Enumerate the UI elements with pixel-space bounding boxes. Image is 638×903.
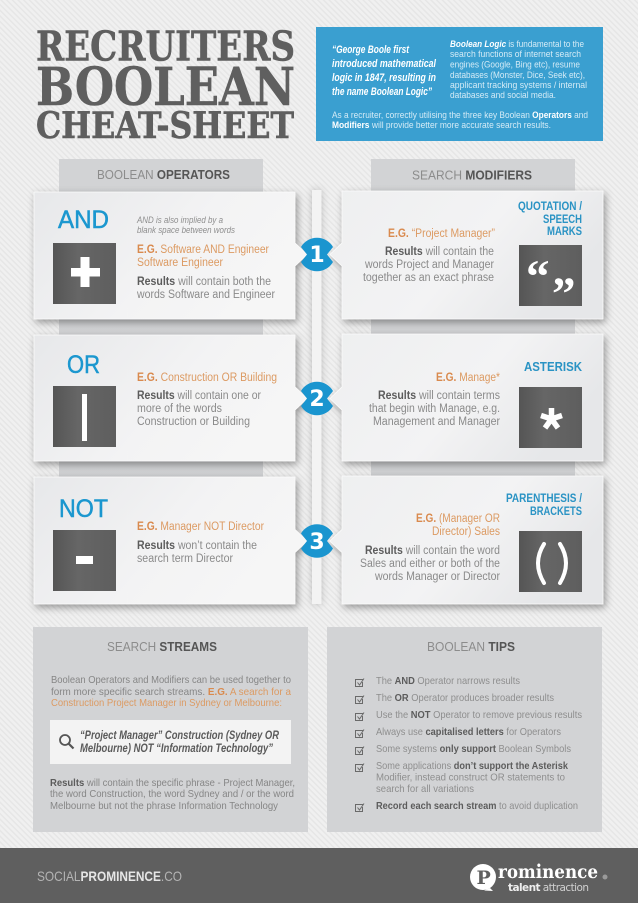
recruiter note: Modifiers will provide better more accurate search results.: [332, 120, 551, 131]
NOT example: E.G. Manager NOT Director: [137, 521, 264, 533]
OR results: more of the words: [137, 403, 222, 415]
AND note: [136, 215, 235, 236]
intro text: databases (Monster, Dice, Seek etc),: [450, 70, 585, 81]
AND results: Results will contain both the: [137, 276, 271, 288]
badge 2: [301, 382, 333, 415]
intro text: engines (Google, Bing etc), resume: [450, 60, 580, 70]
parenthesis example: Director) Sales: [432, 526, 500, 538]
AND label: AND: [58, 206, 109, 234]
panel: OR: [34, 335, 307, 461]
recruiter note: [332, 110, 588, 131]
asterisk example: E.G. Manage*: [436, 372, 500, 384]
tips list: The OR Operator produces broader results: [376, 692, 554, 704]
parenthesis results: Sales and either or both of the: [360, 558, 500, 570]
icon: quotation marks: “: [526, 251, 550, 303]
icon: pipe: [53, 386, 116, 447]
parenthesis results: Results will contain the word: [365, 545, 500, 557]
checkboxes: [356, 678, 364, 812]
quote: the name Boolean Logic”: [332, 86, 432, 98]
logo: prominence: talent attraction: [508, 882, 589, 894]
search streams results: Results will contain the specific phrase - Project Manager,: [50, 777, 295, 789]
panel: boolean tips: [327, 627, 602, 832]
asterisk results: Management and Manager: [373, 416, 500, 428]
icon: plus: [53, 243, 116, 304]
panel: NOT: [34, 477, 307, 604]
quote: introduced mathematical: [332, 58, 437, 70]
logo: prominence: P: [476, 867, 491, 889]
asterisk label: ASTERISK: [524, 360, 582, 374]
heading: boolean operators: BOOLEAN OPERATORS: [97, 167, 230, 182]
logo: prominence: rominence: [498, 861, 598, 883]
parenthesis example: E.G. (Manager OR: [416, 513, 500, 525]
left column backing strip: [59, 159, 263, 604]
panel: asterisk: [330, 334, 603, 461]
asterisk results: Results will contain terms: [378, 390, 500, 402]
icon: magnifier: [60, 735, 74, 748]
footer url: SOCIALPROMINENCE.CO: [37, 868, 182, 884]
tips list: Some systems only support Boolean Symbols: [376, 743, 571, 755]
tips list: The AND Operator narrows results: [376, 675, 520, 687]
quote: “George Boole first: [332, 44, 410, 56]
search query: [80, 730, 280, 755]
centre bar: [312, 190, 322, 604]
search streams intro: [51, 674, 291, 709]
OR example: E.G. Construction OR Building: [137, 372, 277, 384]
badge 3: [301, 524, 333, 558]
intro text: [450, 39, 587, 101]
logo: prominence: [470, 861, 608, 894]
badge 3: 3: [309, 530, 325, 555]
parenthesis label: PARENTHESIS /: [506, 493, 583, 505]
tips list: Use the NOT Operator to remove previous results: [376, 709, 582, 721]
quotation results: Results will contain the: [385, 246, 494, 258]
search streams intro: Boolean Operators and Modifiers can be used together to: [51, 674, 291, 686]
panel: AND: [34, 192, 307, 319]
right column backing strip: [371, 159, 575, 604]
icon: quotation marks: ”: [552, 268, 576, 320]
tips list: Some applications don’t support the Asterisk: [376, 760, 568, 772]
quotation label: MARKS: [547, 226, 582, 238]
icon: minus: [53, 530, 116, 591]
NOT results: [137, 540, 257, 565]
search streams results: [50, 777, 295, 812]
search box: [50, 720, 291, 764]
search streams results: Melbourne but not the phrase Information Technology: [50, 800, 279, 812]
AND results: [136, 276, 275, 301]
AND example: E.G. Software AND Engineer: [137, 244, 269, 256]
panel: search streams: [33, 627, 308, 832]
quotation label: QUOTATION /: [518, 201, 583, 213]
quotation results: [363, 246, 494, 284]
footer: [0, 848, 638, 903]
recruiter note: As a recruiter, correctly utilising the three key Boolean Operators and: [332, 110, 588, 121]
quotation label: SPEECH: [543, 214, 582, 226]
badge 1: [301, 238, 333, 271]
panel: intro: [316, 27, 603, 141]
AND note: AND is also implied by a: [136, 215, 223, 226]
NOT results: Results won’t contain the: [137, 540, 257, 552]
panel: quotation marks: [330, 191, 603, 320]
tips list: Modifier, instead construct OR statements to: [376, 772, 565, 784]
quotation results: together as an exact phrase: [363, 272, 494, 284]
search streams results: the word Construction, the word Sydney and / or the word: [50, 788, 294, 800]
boolean tips heading: BOOLEAN TIPS: [427, 639, 515, 654]
AND example: [137, 244, 269, 269]
tips list: Always use capitalised letters for Operators: [376, 726, 561, 738]
tips list: [376, 675, 582, 812]
quote: logic in 1847, resulting in: [332, 72, 436, 84]
heading: search modifiers: SEARCH MODIFIERS: [412, 168, 532, 182]
OR results: [137, 390, 261, 428]
OR results: Construction or Building: [137, 416, 250, 428]
icon: quotation marks: [519, 245, 582, 320]
title: CHEAT-SHEET: [36, 105, 294, 147]
search streams intro: form more specific search streams. E.G. A search for a: [51, 686, 291, 698]
title: [36, 22, 295, 147]
search query: Melbourne) NOT “Information Technology”: [80, 743, 273, 755]
search streams intro: Construction Project Manager in Sydney or Melbourne:: [51, 697, 282, 709]
tips list: Record each search stream to avoid duplication: [376, 800, 578, 812]
parenthesis label: [506, 493, 583, 518]
title: RECRUITERS: [36, 22, 295, 70]
intro text: search functions of internet search: [450, 49, 581, 60]
search streams heading: SEARCH STREAMS: [107, 639, 217, 654]
intro text: applicant tracking systems / internal: [450, 80, 587, 91]
intro text: databases and social media.: [450, 90, 556, 101]
intro text: Boolean Logic is fundamental to the: [450, 39, 584, 50]
badge 2: 2: [309, 387, 325, 412]
AND example: Software Engineer: [137, 257, 223, 269]
title: BOOLEAN: [36, 57, 295, 118]
badge 1: 1: [309, 243, 325, 268]
OR label: OR: [67, 351, 100, 379]
icon: asterisk: [519, 387, 582, 448]
tips list: search for all variations: [376, 783, 474, 795]
NOT label: NOT: [59, 495, 108, 523]
OR results: Results will contain one or: [137, 390, 261, 402]
icon: parentheses: [519, 531, 582, 592]
parenthesis label: BRACKETS: [530, 506, 582, 518]
asterisk results: [369, 390, 500, 428]
parenthesis results: words Manager or Director: [374, 571, 500, 583]
quotation example: E.G. “Project Manager”: [388, 228, 495, 240]
quote: [332, 44, 437, 98]
asterisk results: that begin with Manage, e.g.: [369, 403, 500, 415]
NOT results: search term Director: [137, 553, 233, 565]
AND results: words Software and Engineer: [136, 289, 275, 301]
parenthesis example: [416, 513, 500, 538]
panel: parenthesis: [330, 476, 603, 604]
search query: “Project Manager” Construction (Sydney OR: [80, 730, 280, 742]
AND note: blank space between words: [137, 225, 235, 236]
quotation results: words Project and Manager: [364, 259, 494, 271]
parenthesis results: [360, 545, 500, 583]
quotation label: [518, 201, 583, 238]
